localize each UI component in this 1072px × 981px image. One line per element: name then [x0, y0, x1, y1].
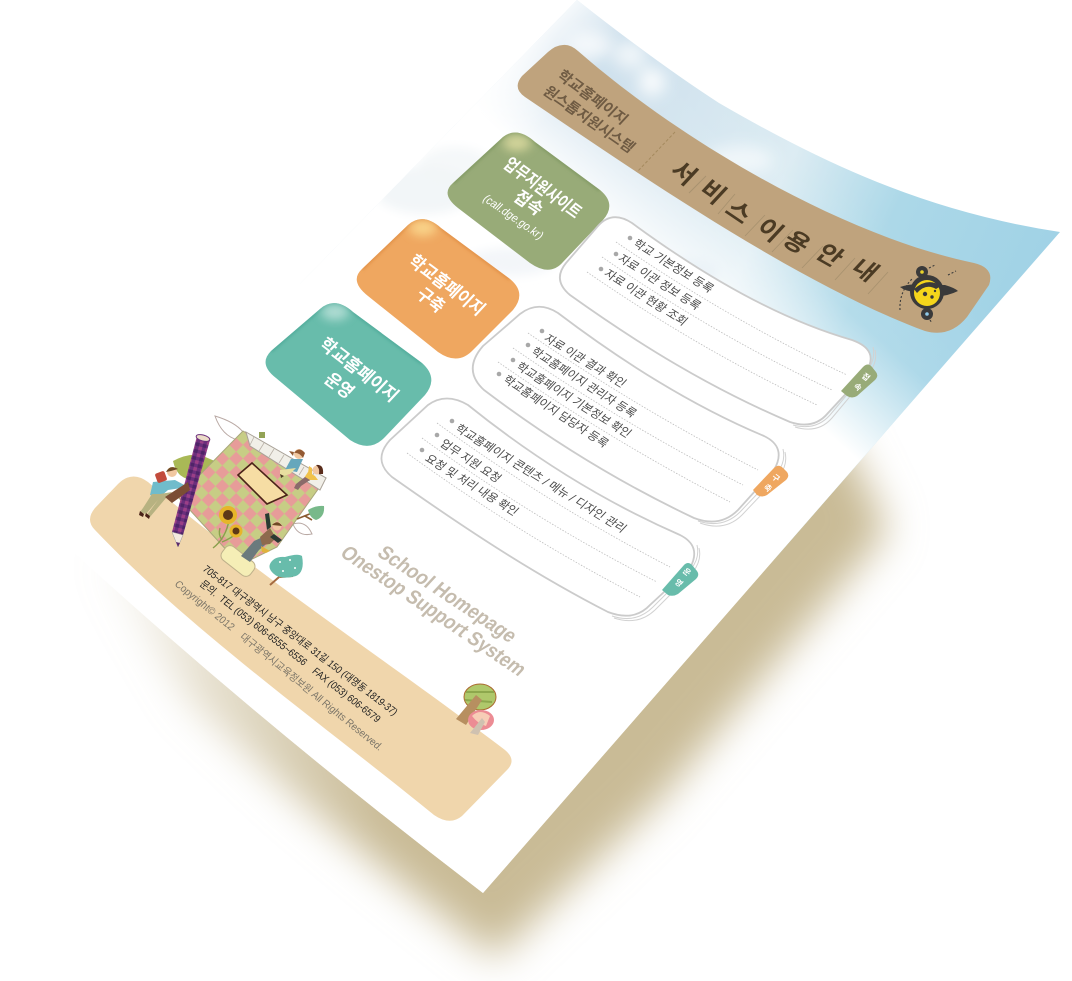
notebook spiral — [246, 432, 326, 490]
contact and copyright text: Copyright© 2012 대구광역시교육정보원 All Rights Reserved. — [172, 578, 385, 753]
boy with backpack — [139, 467, 190, 519]
card: homepage operation: 학교홈페이지 — [315, 334, 403, 406]
pencil — [172, 436, 210, 535]
heading: English name: School Homepage — [373, 542, 522, 647]
tab: build — [753, 466, 788, 496]
list items: 학교홈페이지 담당자 등록 — [500, 373, 611, 450]
list items — [599, 236, 717, 328]
sunflowers — [213, 506, 242, 548]
notebook label — [238, 463, 287, 504]
banner title: 서 — [665, 157, 702, 191]
list items: 학교홈페이지 기본정보 확인 — [513, 360, 634, 440]
illustration: notebook with children — [139, 416, 326, 585]
banner divider — [637, 132, 675, 172]
card: homepage operation — [266, 303, 431, 446]
leaf outlines — [215, 416, 312, 535]
tab: access: 접 — [860, 371, 872, 383]
heading: English name: Onestop Support System — [336, 542, 531, 680]
tab: build: 축 — [762, 482, 774, 494]
card: homepage build — [357, 219, 519, 359]
green bush — [173, 455, 217, 481]
card: homepage build: 구축 — [412, 284, 449, 316]
tab: access — [841, 364, 877, 398]
banner title: 비 — [693, 176, 731, 210]
notebook cover — [178, 431, 326, 565]
girl in blue — [280, 449, 305, 478]
banner title — [665, 157, 888, 294]
contact and copyright text: 705-817 대구광역시 남구 중앙대로 31길 150 (대명동 1819-37) — [200, 563, 401, 718]
icon: planet mascot — [900, 265, 958, 323]
teal tree — [270, 555, 303, 585]
tab: access: 속 — [852, 382, 864, 393]
list items: 자료 이관 현황 조회 — [601, 267, 691, 328]
tab: operation: 영 — [673, 577, 685, 589]
footer band — [90, 476, 512, 821]
banner subtitle: 원스톱지원시스템 — [539, 83, 638, 156]
small tree — [297, 513, 312, 520]
card: support site access: 업무지원사이트 — [499, 154, 586, 222]
card: support site access — [448, 133, 609, 270]
panel: operation items — [381, 398, 700, 621]
banner title: 용 — [777, 227, 816, 259]
girl in yellow — [294, 465, 323, 490]
tab: operation — [662, 563, 698, 596]
list items: 자료 이관 결과 확인 — [541, 332, 629, 390]
card: homepage operation: 운영 — [320, 369, 358, 402]
illustration: two striped trees — [456, 684, 496, 735]
list items: 학교홈페이지 관리자 등록 — [528, 345, 639, 420]
banner title: 안 — [810, 240, 849, 272]
sky background with clouds — [182, 0, 1060, 893]
panel: access items — [560, 217, 877, 429]
tab: operation: 운 — [681, 567, 693, 578]
banner subtitle: 학교홈페이지 — [553, 67, 631, 128]
card: homepage build: 학교홈페이지 — [404, 251, 489, 319]
boy on scroll — [219, 513, 282, 579]
banner title: 내 — [845, 255, 884, 286]
top kraft banner — [518, 45, 990, 333]
card: support site access: (call.dge.go.kr) — [480, 192, 547, 242]
list items: 학교 기본정보 등록 — [630, 237, 717, 295]
page drop shadow — [100, 440, 888, 958]
panel: build items — [473, 307, 788, 526]
list items — [497, 329, 639, 450]
banner title: 이 — [750, 214, 789, 247]
list items: 요청 및 처리 내용 확인 — [422, 452, 521, 518]
contact and copyright text: 문의. TEL (053) 606-6555~6556 FAX (053) 606-6579 — [197, 578, 383, 725]
card: support site access: 접속 — [509, 187, 548, 219]
banner title: 스 — [719, 196, 757, 229]
tab: build: 구 — [770, 473, 782, 484]
list items: 자료 이관 정보 등록 — [615, 252, 704, 312]
list items: 업무 지원 요청 — [437, 437, 504, 485]
list items: 학교홈페이지 콘텐츠 / 메뉴 / 디자인 관리 — [452, 422, 630, 535]
